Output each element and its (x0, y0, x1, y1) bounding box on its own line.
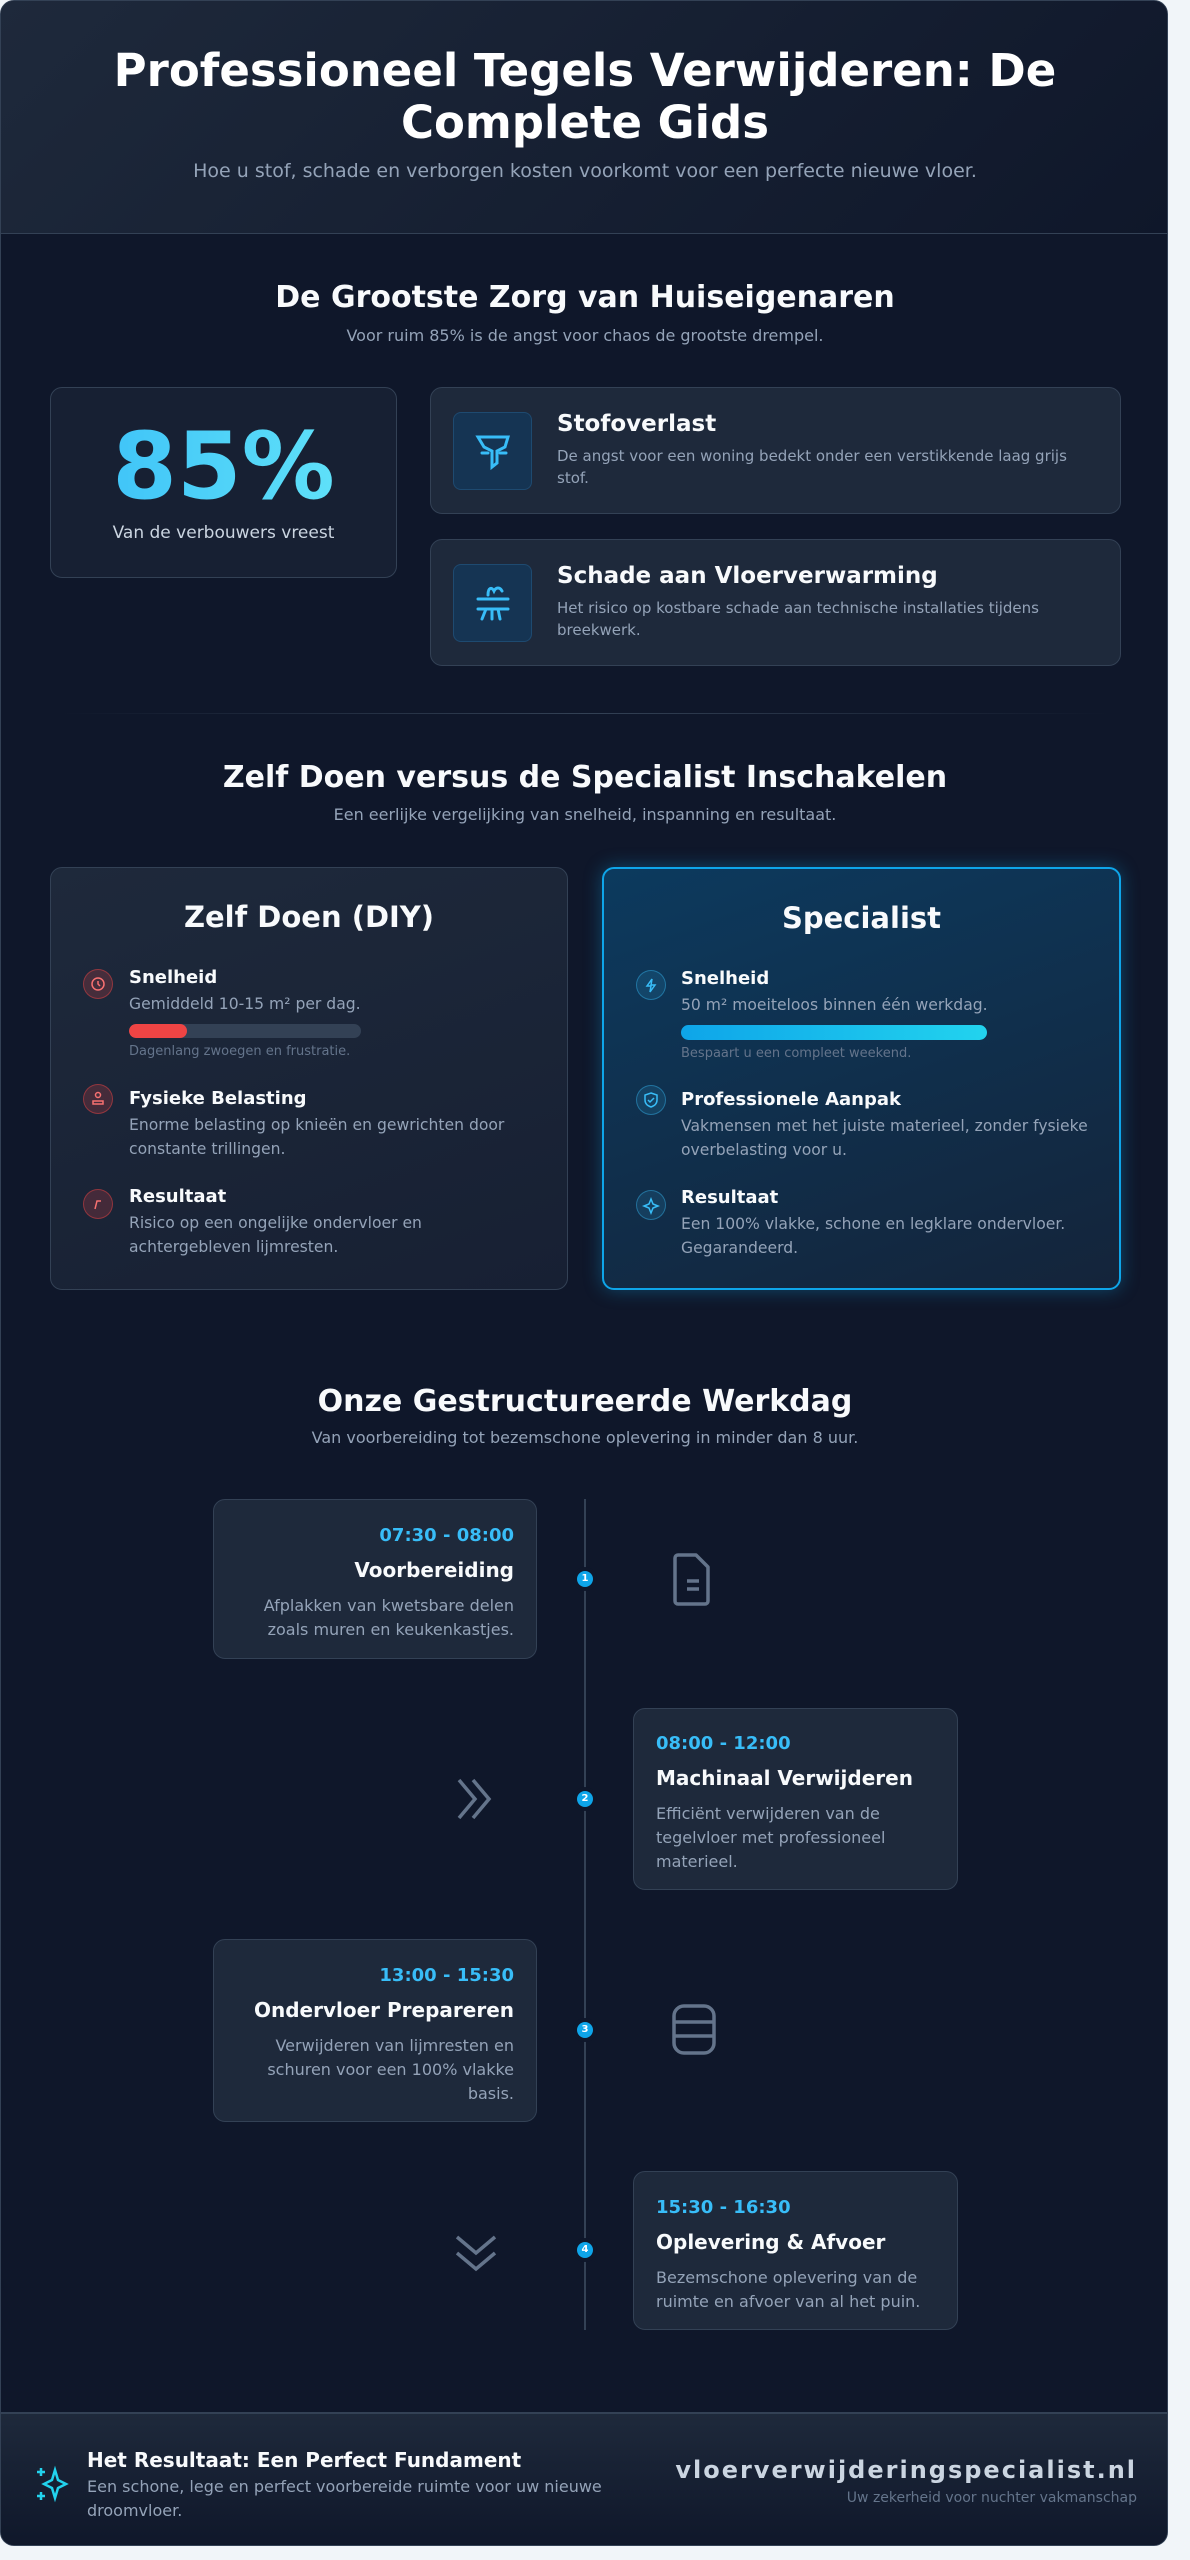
section heading: werkdag: Onze Gestructureerde Werkdag (318, 1384, 852, 1419)
icon: clock (83, 969, 113, 999)
bar: slow (129, 1024, 361, 1038)
item: resultaat (681, 1187, 1065, 1257)
icon: trend (83, 1189, 113, 1219)
icon: funnel (453, 412, 532, 490)
step 4 card: Oplevering & Afvoer (656, 2230, 885, 2254)
title: Professioneel Tegels Verwijderen: De (114, 44, 1056, 97)
item: snelheid: Snelheid (129, 967, 217, 988)
item: aanpak: Professionele Aanpak (681, 1089, 901, 1110)
step 2 marker (577, 1791, 593, 1807)
step 1 card (213, 1499, 537, 1659)
step 1 card: Afplakken van kwetsbare delen zoals muren en keukenkastjes. (264, 1596, 514, 1639)
step 4 marker: 4 (582, 2244, 588, 2255)
step 2 card: 08:00 - 12:00 (656, 1733, 791, 1754)
item: resultaat: Resultaat (681, 1187, 778, 1208)
tagline: Uw zekerheid voor nuchter vakmanschap (847, 2490, 1137, 2506)
step 2 marker: 2 (582, 1793, 588, 1804)
text: Het risico op kostbare schade aan technische installaties tijdens breekwerk. (557, 599, 1039, 639)
step 3 marker (577, 2022, 593, 2038)
icon: layers (672, 2004, 716, 2055)
item: resultaat: Risico op een ongelijke ondervloer en (129, 1214, 422, 1232)
icon: sparkle (636, 1190, 666, 1220)
icon: bolt (636, 970, 666, 1000)
footer text: Een schone, lege en perfect voorbereide ruimte voor uw nieuwe droomvloer. (87, 2477, 602, 2520)
icon: chevrons down (456, 2236, 496, 2272)
step 4 card: 15:30 - 16:30 (656, 2197, 791, 2218)
item: snelheid: Gemiddeld 10-15 m² per dag. (129, 995, 361, 1013)
step 3 card: Ondervloer Prepareren (254, 1998, 514, 2022)
panel: DIY (50, 867, 568, 1290)
subtitle: Hoe u stof, schade en verborgen kosten voorkomt voor een perfecte nieuwe vloer. (193, 160, 977, 182)
item: resultaat: Een 100% vlakke, schone en legklare ondervloer. Gegarandeerd. (681, 1215, 1065, 1257)
step 4 card: Bezemschone oplevering van de ruimte en afvoer van al het puin. (656, 2268, 920, 2311)
stat panel 85% (50, 387, 397, 578)
title (114, 44, 1056, 149)
panel: vloerverwarming (430, 539, 1121, 666)
step 3 card: 13:00 - 15:30 (379, 1965, 514, 1986)
stat number (51, 410, 396, 522)
header (1, 1, 1169, 234)
step 4 marker (577, 2242, 593, 2258)
step 3 card (213, 1939, 537, 2122)
step 4 card (633, 2171, 958, 2330)
item: snelheid: 50 m² moeiteloos binnen één werkdag. (681, 996, 988, 1014)
text: De angst voor een woning bedekt onder een verstikkende laag grijs stof. (557, 447, 1067, 487)
item: snelheid: Snelheid (681, 968, 769, 989)
panel: specialist (602, 867, 1121, 1290)
section heading: vergelijking: Zelf Doen versus de Specialist Inschakelen (223, 760, 947, 795)
stat number: 85% (112, 412, 335, 520)
title: Schade aan Vloerverwarming (557, 563, 938, 589)
step 2 card: Machinaal Verwijderen (656, 1766, 913, 1790)
icon: shield (636, 1085, 666, 1115)
panel: stofoverlast (430, 387, 1121, 514)
item: fysieke belasting: Enorme belasting op knieën en gewrichten door constante trillingen. (129, 1116, 504, 1158)
footer title: Het Resultaat: Een Perfect Fundament (87, 2448, 521, 2472)
section subtitle: zorg: Voor ruim 85% is de angst voor chaos de grootste drempel. (346, 326, 824, 345)
timeline line (584, 1499, 586, 2330)
stat caption: Van de verbouwers vreest (113, 523, 334, 543)
step 1 marker (577, 1571, 593, 1587)
DIY title: Zelf Doen (DIY) (184, 900, 434, 934)
icon: sparkle (37, 2466, 69, 2502)
icon: chevrons right (458, 1779, 492, 1819)
step 2 card: Efficiënt verwijderen van de tegelvloer met professioneel materieel. (656, 1804, 885, 1871)
step 2 card (633, 1708, 958, 1890)
item: aanpak: Vakmensen met het juiste materieel, zonder fysieke overbelasting voor u. (681, 1117, 1088, 1159)
icon: person (83, 1084, 113, 1114)
section subtitle: werkdag: Van voorbereiding tot bezemschone oplevering in minder dan 8 uur. (312, 1428, 858, 1447)
item: fysieke belasting (129, 1088, 504, 1158)
item: fysieke belasting: Fysieke Belasting (129, 1088, 307, 1109)
footer (1, 2412, 1169, 2547)
section heading: zorg: De Grootste Zorg van Huiseigenaren (275, 280, 895, 315)
section subtitle: vergelijking: Een eerlijke vergelijking van snelheid, inspanning en resultaat. (334, 805, 836, 824)
step 3 marker: 3 (582, 2024, 588, 2035)
item: aanpak (681, 1089, 1088, 1159)
item: snelheid (681, 968, 988, 1061)
item: resultaat (129, 1186, 422, 1256)
specialist title: Specialist (782, 901, 941, 935)
icon: document (673, 1553, 710, 1606)
step 1 card: Voorbereiding (354, 1558, 514, 1582)
title: Complete Gids (401, 96, 769, 149)
step 1 marker: 1 (582, 1573, 588, 1584)
item: resultaat: Resultaat (129, 1186, 226, 1207)
step 3 card: Verwijderen van lijmresten en schuren voor een 100% vlakke basis. (267, 2036, 514, 2103)
step 1 card: 07:30 - 08:00 (379, 1525, 514, 1546)
title: Stofoverlast (557, 411, 716, 437)
item: snelheid (129, 967, 361, 1059)
item: snelheid: Dagenlang zwoegen en frustratie. (129, 1044, 350, 1059)
icon: pipes (453, 564, 532, 642)
domain: vloerverwijderingspecialist.nl (675, 2456, 1137, 2484)
item: snelheid: Bespaart u een compleet weekend. (681, 1046, 911, 1061)
item: resultaat: achtergebleven lijmresten. (129, 1238, 338, 1256)
bar: fast (681, 1025, 987, 1040)
